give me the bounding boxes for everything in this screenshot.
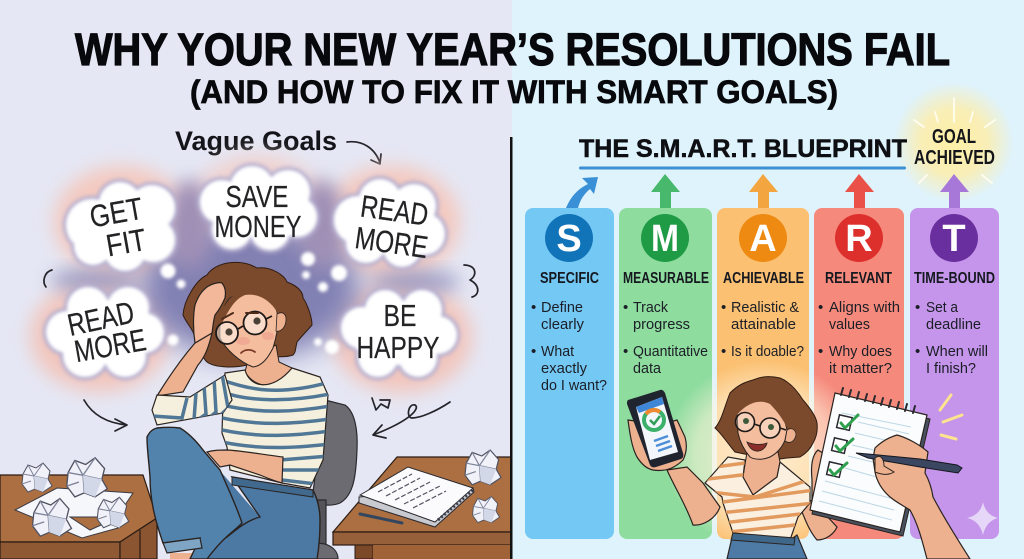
- crumpled papers on left desk: [15, 458, 133, 538]
- goal achieved glow: [894, 82, 1014, 202]
- column: time-bound: [910, 208, 999, 539]
- column: time-bound: TIME-BOUND: [914, 270, 995, 287]
- column: measurable: [619, 208, 712, 539]
- neck: [245, 345, 292, 385]
- column: specific: SPECIFIC: [540, 270, 599, 287]
- ear: [276, 313, 286, 331]
- brows: [222, 313, 258, 319]
- panel: S.M.A.R.T. blueprint: [525, 126, 999, 539]
- column: specific: •: [531, 343, 536, 360]
- cloud: read more (left): READ: [64, 295, 137, 343]
- heading underline: [579, 166, 906, 170]
- raised arm: [667, 467, 720, 525]
- orange striped top: [700, 457, 815, 540]
- column: specific: [525, 208, 614, 539]
- goal achieved label: [914, 126, 995, 169]
- phone hand: [628, 420, 686, 471]
- glasses: [216, 312, 272, 344]
- yellow emphasis ticks: [940, 395, 962, 439]
- smile: [747, 442, 767, 451]
- raised leg: [147, 427, 242, 559]
- column: specific: •: [531, 299, 536, 316]
- column: specific: do I want?: [541, 377, 607, 394]
- column: achievable: •: [721, 343, 726, 360]
- pen: [856, 453, 962, 473]
- glasses: [736, 412, 786, 438]
- arrow: measurable: [651, 174, 680, 208]
- column: specific: What: [541, 343, 575, 360]
- column: relevant: it matter?: [829, 360, 892, 377]
- column: relevant: [814, 208, 904, 539]
- column: specific: Define: [541, 299, 583, 316]
- column: achievable: A: [749, 218, 777, 260]
- hair: [715, 377, 817, 460]
- second arm: [800, 500, 837, 540]
- striped top: [222, 368, 330, 488]
- cloud: save money: SAVE: [226, 179, 288, 214]
- resting forearm: [207, 450, 283, 483]
- column: relevant: R: [845, 218, 873, 260]
- column: relevant: Aligns with: [829, 299, 900, 316]
- column: relevant: values: [829, 316, 870, 333]
- belt: [731, 533, 795, 545]
- column: achievable: •: [721, 299, 726, 316]
- soft aura: [665, 360, 865, 550]
- neck: [743, 452, 780, 495]
- fingers: [875, 456, 894, 474]
- right desk: [333, 457, 511, 559]
- cloud: save money: [197, 163, 320, 253]
- figure: stressed woman: [147, 262, 330, 559]
- jeans: [727, 533, 807, 559]
- column: measurable: progress: [633, 316, 690, 333]
- column: measurable: Track: [633, 299, 668, 316]
- column: time-bound: Set a: [926, 299, 959, 316]
- panel: vague goals: [30, 126, 478, 438]
- face: [220, 293, 278, 367]
- cloud: be happy: HAPPY: [356, 330, 440, 365]
- column: specific: exactly: [541, 360, 587, 377]
- centre divider: [510, 137, 512, 559]
- arrow: relevant: [845, 174, 874, 208]
- goal achieved label: ACHIEVED: [914, 147, 995, 169]
- cloud: get fit: GET: [87, 191, 145, 234]
- cloud: read more (right): READ: [358, 189, 431, 233]
- column: time-bound: •: [915, 343, 920, 360]
- column: time-bound: deadline: [926, 316, 981, 333]
- eyes: [743, 418, 774, 430]
- stress squiggles and arrows: [44, 265, 478, 438]
- column: measurable: •: [623, 343, 628, 360]
- column: measurable: data: [633, 360, 662, 377]
- column: achievable: [717, 208, 809, 539]
- chair: [305, 400, 357, 559]
- cloud: read more (left): MORE: [72, 322, 149, 369]
- writing arm: [873, 435, 970, 559]
- jeans cuff: [163, 538, 202, 553]
- cloud: get fit: [63, 179, 178, 274]
- column: time-bound: When will: [926, 343, 988, 360]
- column: measurable: M: [651, 218, 679, 260]
- notepad: [810, 388, 930, 536]
- left background: [0, 0, 512, 559]
- belt and waist: [232, 477, 313, 497]
- cloud: read more (right): [331, 176, 448, 270]
- fringe: [733, 397, 790, 432]
- hair fringe: [216, 286, 283, 335]
- heading: vague goals: Vague Goals: [175, 126, 337, 156]
- column: time-bound: T: [942, 218, 966, 260]
- arrow: time-bound: [940, 174, 969, 208]
- cloud: read more (left): [43, 284, 167, 380]
- column: time-bound: •: [915, 299, 920, 316]
- title: [75, 24, 950, 110]
- column: measurable: MEASURABLE: [623, 270, 709, 287]
- face: [737, 398, 787, 459]
- left desk: [0, 475, 157, 559]
- arrow: achievable: [749, 174, 778, 208]
- eyes: [225, 317, 261, 336]
- column: specific: S: [556, 218, 582, 260]
- ear: [785, 429, 796, 442]
- arrow: specific: [566, 177, 598, 208]
- mouth: [241, 350, 255, 353]
- column: relevant: •: [818, 343, 823, 360]
- figure: happy woman: [627, 360, 970, 559]
- notebook on right desk: [359, 450, 501, 527]
- raised forearm: [157, 333, 212, 396]
- hand on head: [194, 283, 226, 343]
- cheeks: [236, 332, 274, 345]
- title line 2: (AND HOW TO FIX IT WITH SMART GOALS): [190, 74, 838, 110]
- hair: [183, 262, 312, 367]
- jeans hips and thigh: [207, 477, 320, 559]
- thought cloud haze: [30, 155, 472, 393]
- cloud: read more (right): MORE: [353, 220, 430, 265]
- column: achievable: attainable: [731, 316, 796, 333]
- right background: [512, 0, 1024, 559]
- column: achievable: Is it doable?: [731, 343, 804, 360]
- raised sleeve: [152, 374, 232, 428]
- cloud: be happy: BE: [384, 298, 416, 333]
- phone: [627, 390, 683, 467]
- arrow: heading to clouds: [347, 142, 381, 164]
- cloud: get fit: FIT: [103, 222, 149, 263]
- goal achieved label: GOAL: [932, 126, 976, 148]
- column: time-bound: I finish?: [926, 360, 976, 377]
- cloud: save money: MONEY: [214, 209, 302, 244]
- column: relevant: •: [818, 299, 823, 316]
- jeans underlayer: [200, 465, 260, 559]
- column: measurable: •: [623, 299, 628, 316]
- cloud: be happy: [338, 287, 460, 380]
- notepad hand: [812, 450, 826, 505]
- sparkle mark: [967, 502, 998, 535]
- column: relevant: RELEVANT: [825, 270, 892, 287]
- column: specific: clearly: [541, 316, 584, 333]
- column: measurable: Quantitative: [633, 343, 708, 360]
- heading: the smart blueprint: THE S.M.A.R.T. BLUEPRINT: [579, 135, 907, 163]
- column: relevant: Why does: [829, 343, 892, 360]
- column: achievable: Realistic &: [731, 299, 799, 316]
- thought bubbles: [160, 252, 347, 354]
- foot: [170, 553, 200, 559]
- column: achievable: ACHIEVABLE: [723, 270, 804, 287]
